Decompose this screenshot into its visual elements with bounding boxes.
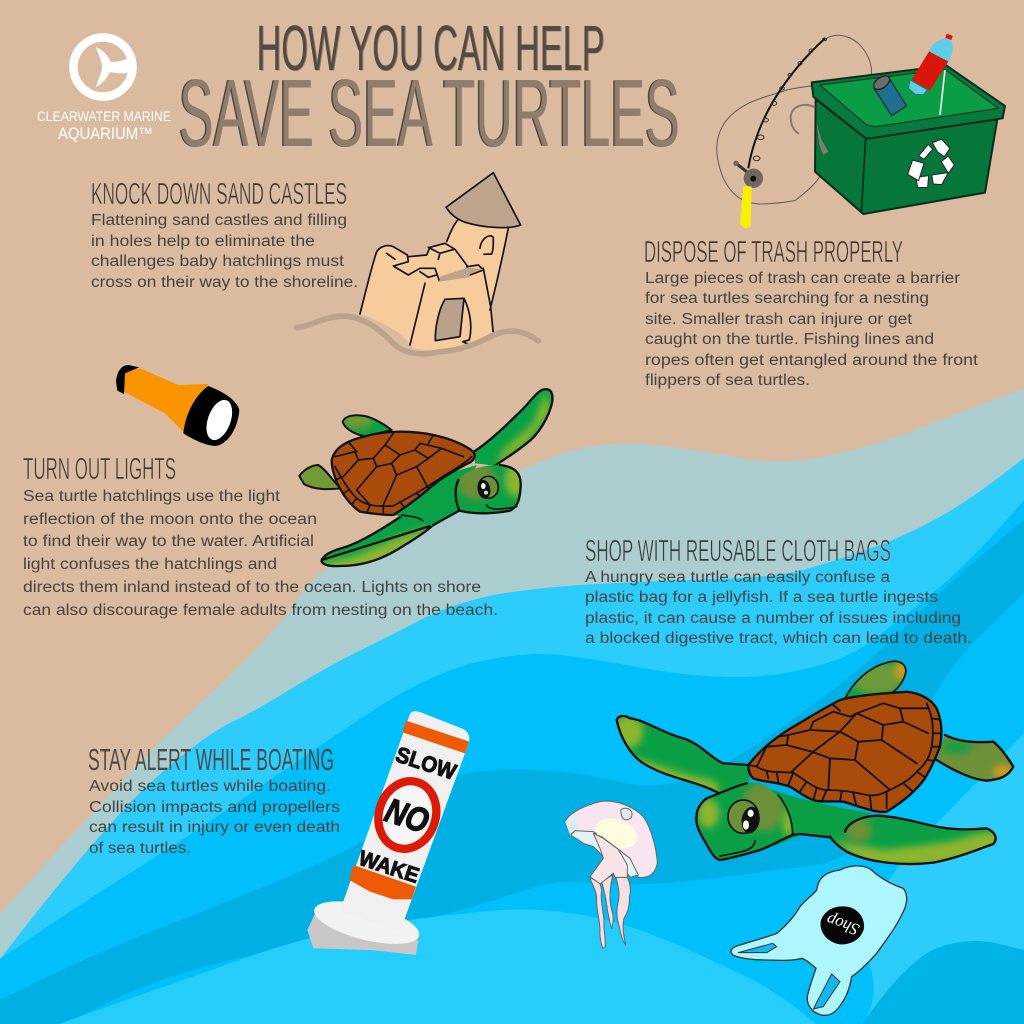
bin rim	[812, 66, 1005, 138]
oral arms	[571, 831, 638, 877]
section: knock down sand castles: cross on their way to the shoreline.	[91, 274, 358, 291]
head	[696, 782, 794, 860]
section: stay alert while boating: of sea turtles.	[89, 840, 191, 857]
tentacles	[590, 877, 605, 948]
section: dispose of trash properly	[644, 234, 979, 389]
section: stay alert while boating: Avoid sea turtles while boating.	[89, 778, 331, 795]
icon: plastic bag	[731, 866, 907, 1015]
bin body	[815, 99, 997, 214]
icon: slow no wake buoy: SLOW	[393, 742, 460, 785]
section: knock down sand castles: in holes help to eliminate the	[91, 233, 315, 250]
icon: big sea turtle	[613, 660, 1013, 867]
section: dispose of trash properly: caught on the turtle. Fishing lines and	[645, 331, 934, 348]
flippers	[299, 389, 552, 573]
section: turn out lights: directs them inland instead of to the ocean. Lights on shore	[23, 579, 481, 596]
icon: slow no wake buoy: WAKE	[356, 846, 422, 888]
fishing reel	[736, 163, 747, 172]
left front flipper	[613, 715, 750, 797]
section: shop with reusable cloth bags: a blocked digestive tract, which can lead to death.	[585, 630, 972, 647]
icon: slow no wake buoy	[307, 711, 469, 955]
top back flipper	[845, 660, 909, 698]
section: turn out lights	[23, 451, 498, 619]
icon: jellyfish	[565, 801, 657, 948]
section: stay alert while boating: Collision impacts and propellers	[89, 799, 340, 816]
section: knock down sand castles: Flattening sand castles and filling	[91, 212, 347, 229]
icon: fishing rod and recycling bin	[717, 34, 1005, 228]
plastic bottle	[909, 34, 953, 95]
section: shop with reusable cloth bags	[585, 533, 972, 647]
tower roof	[446, 173, 521, 228]
logo: Clearwater Marine Aquarium: AQUARIUM™	[58, 125, 153, 143]
jellyfish bell	[565, 801, 657, 877]
section: dispose of trash properly: for sea turtles searching for a nesting	[645, 290, 929, 307]
head	[454, 463, 525, 513]
bag logo	[821, 906, 864, 944]
section: turn out lights: Sea turtle hatchlings use the light	[23, 488, 281, 505]
shell	[748, 692, 941, 812]
section: dispose of trash properly: site. Smaller trash can injure or get	[645, 311, 913, 328]
logo: Clearwater Marine Aquarium: CLEARWATER MARINE	[37, 109, 171, 124]
section: stay alert while boating	[88, 742, 340, 857]
ocean waves background	[0, 389, 1024, 1024]
icon: sand castle	[297, 173, 538, 354]
right back flipper	[937, 735, 1013, 781]
icon: flashlight	[116, 365, 239, 446]
soda can	[871, 73, 907, 116]
shell scutes	[748, 703, 943, 812]
icon: plastic bag: Shop	[824, 910, 862, 939]
title: HOW YOU CAN HELP	[256, 12, 604, 84]
section: turn out lights: reflection of the moon onto the ocean	[23, 511, 317, 528]
section: turn out lights: TURN OUT LIGHTS	[23, 451, 176, 486]
section: knock down sand castles: KNOCK DOWN SAND CASTLES	[91, 176, 347, 211]
section: stay alert while boating: STAY ALERT WHILE BOATING	[88, 742, 334, 777]
section: shop with reusable cloth bags: A hungry sea turtle can easily confuse a	[585, 569, 890, 586]
castle door	[435, 298, 464, 341]
lower front flipper	[747, 782, 1000, 867]
section: shop with reusable cloth bags: plastic, it can cause a number of issues including	[585, 610, 961, 627]
icon: hatchling turtle	[299, 389, 552, 573]
section: dispose of trash properly: Large pieces of trash can create a barrier	[645, 270, 960, 287]
title	[178, 12, 680, 167]
title: HOW YOU CAN HELP	[258, 12, 606, 84]
neck	[393, 465, 477, 527]
fishing rod	[748, 38, 825, 168]
section: knock down sand castles	[91, 176, 358, 291]
section: shop with reusable cloth bags: plastic bag for a jellyfish. If a sea turtle ingests	[585, 589, 938, 606]
section: dispose of trash properly: ropes often get entangled around the front	[645, 352, 979, 369]
fishing line	[717, 35, 872, 204]
section: turn out lights: to find their way to the water. Artificial	[23, 533, 314, 550]
bin interior	[820, 69, 998, 127]
recycle symbol	[908, 139, 954, 188]
section: turn out lights: light confuses the hatchlings and	[23, 556, 277, 573]
shell scutes	[333, 433, 472, 515]
section: turn out lights: can also discourage female adults from nesting on the beach.	[23, 602, 498, 619]
sand mound	[297, 316, 538, 354]
logo: Clearwater Marine Aquarium	[37, 38, 171, 143]
section: dispose of trash properly: flippers of sea turtles.	[645, 372, 810, 389]
section: stay alert while boating: can result in injury or even death	[89, 819, 340, 836]
shell	[332, 432, 475, 515]
section: knock down sand castles: challenges baby hatchlings must	[91, 253, 345, 270]
icon: slow no wake buoy: NO	[380, 791, 433, 841]
